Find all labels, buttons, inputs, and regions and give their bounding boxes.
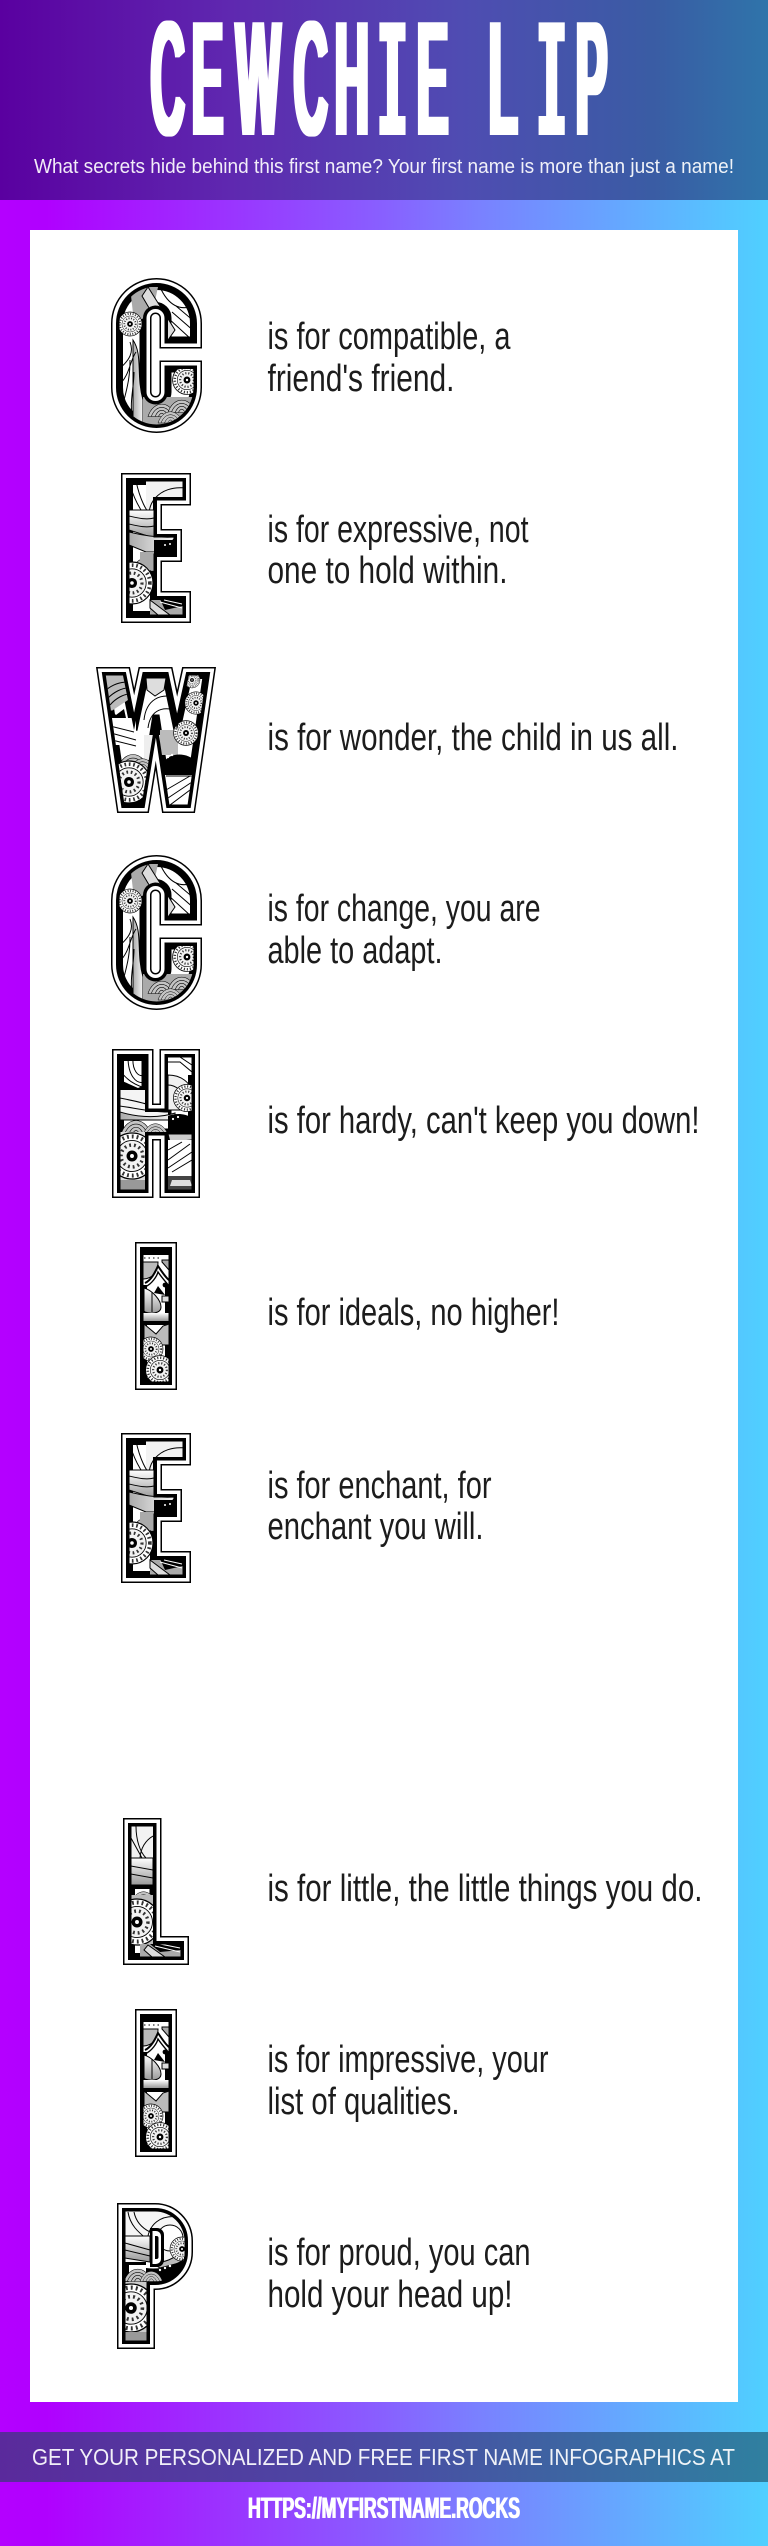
icon: letter E <box>111 481 185 615</box>
footer band <box>0 2432 768 2482</box>
text: E <box>268 1465 492 1548</box>
text: E: is for enchant, for <box>268 1465 492 1507</box>
text: P <box>268 2232 530 2316</box>
icon: letter H <box>109 1057 201 1190</box>
subtitle: What secrets hide behind this first name? Your first name is more than just a name! <box>34 156 734 178</box>
icon: letter P <box>107 2211 194 2342</box>
icon: letter I <box>139 2017 174 2151</box>
icon: letter W <box>104 672 207 807</box>
text: P: is for proud, you can <box>268 2232 530 2274</box>
text: P: hold your head up! <box>268 2274 512 2316</box>
P counter <box>150 2228 164 2267</box>
text: C <box>268 888 540 972</box>
icon: letter E <box>111 1441 185 1575</box>
text: C: friend's friend. <box>268 358 454 400</box>
icon: letter I <box>139 1250 174 1384</box>
text: C: is for change, you are <box>268 888 540 930</box>
text: E: is for expressive, not <box>268 509 529 551</box>
text: E: enchant you will. <box>268 1506 484 1548</box>
website url: HTTPS://MYFIRSTNAME.ROCKS <box>248 2492 520 2525</box>
icon: letter L <box>114 1826 181 1957</box>
text: I: list of qualities. <box>268 2081 460 2123</box>
text: E <box>268 509 529 592</box>
icon: letter C <box>118 286 201 425</box>
text: I: is for impressive, your <box>268 2039 549 2081</box>
text: E: one to hold within. <box>268 550 508 592</box>
text: C: able to adapt. <box>268 930 442 972</box>
white content panel <box>30 230 738 2402</box>
text: I <box>268 2039 549 2123</box>
text: I: is for ideals, no higher! <box>268 1292 560 1334</box>
header band <box>0 0 768 200</box>
text: C <box>268 316 511 400</box>
text: C: is for compatible, a <box>268 316 511 358</box>
icon: letter C <box>118 864 201 1002</box>
